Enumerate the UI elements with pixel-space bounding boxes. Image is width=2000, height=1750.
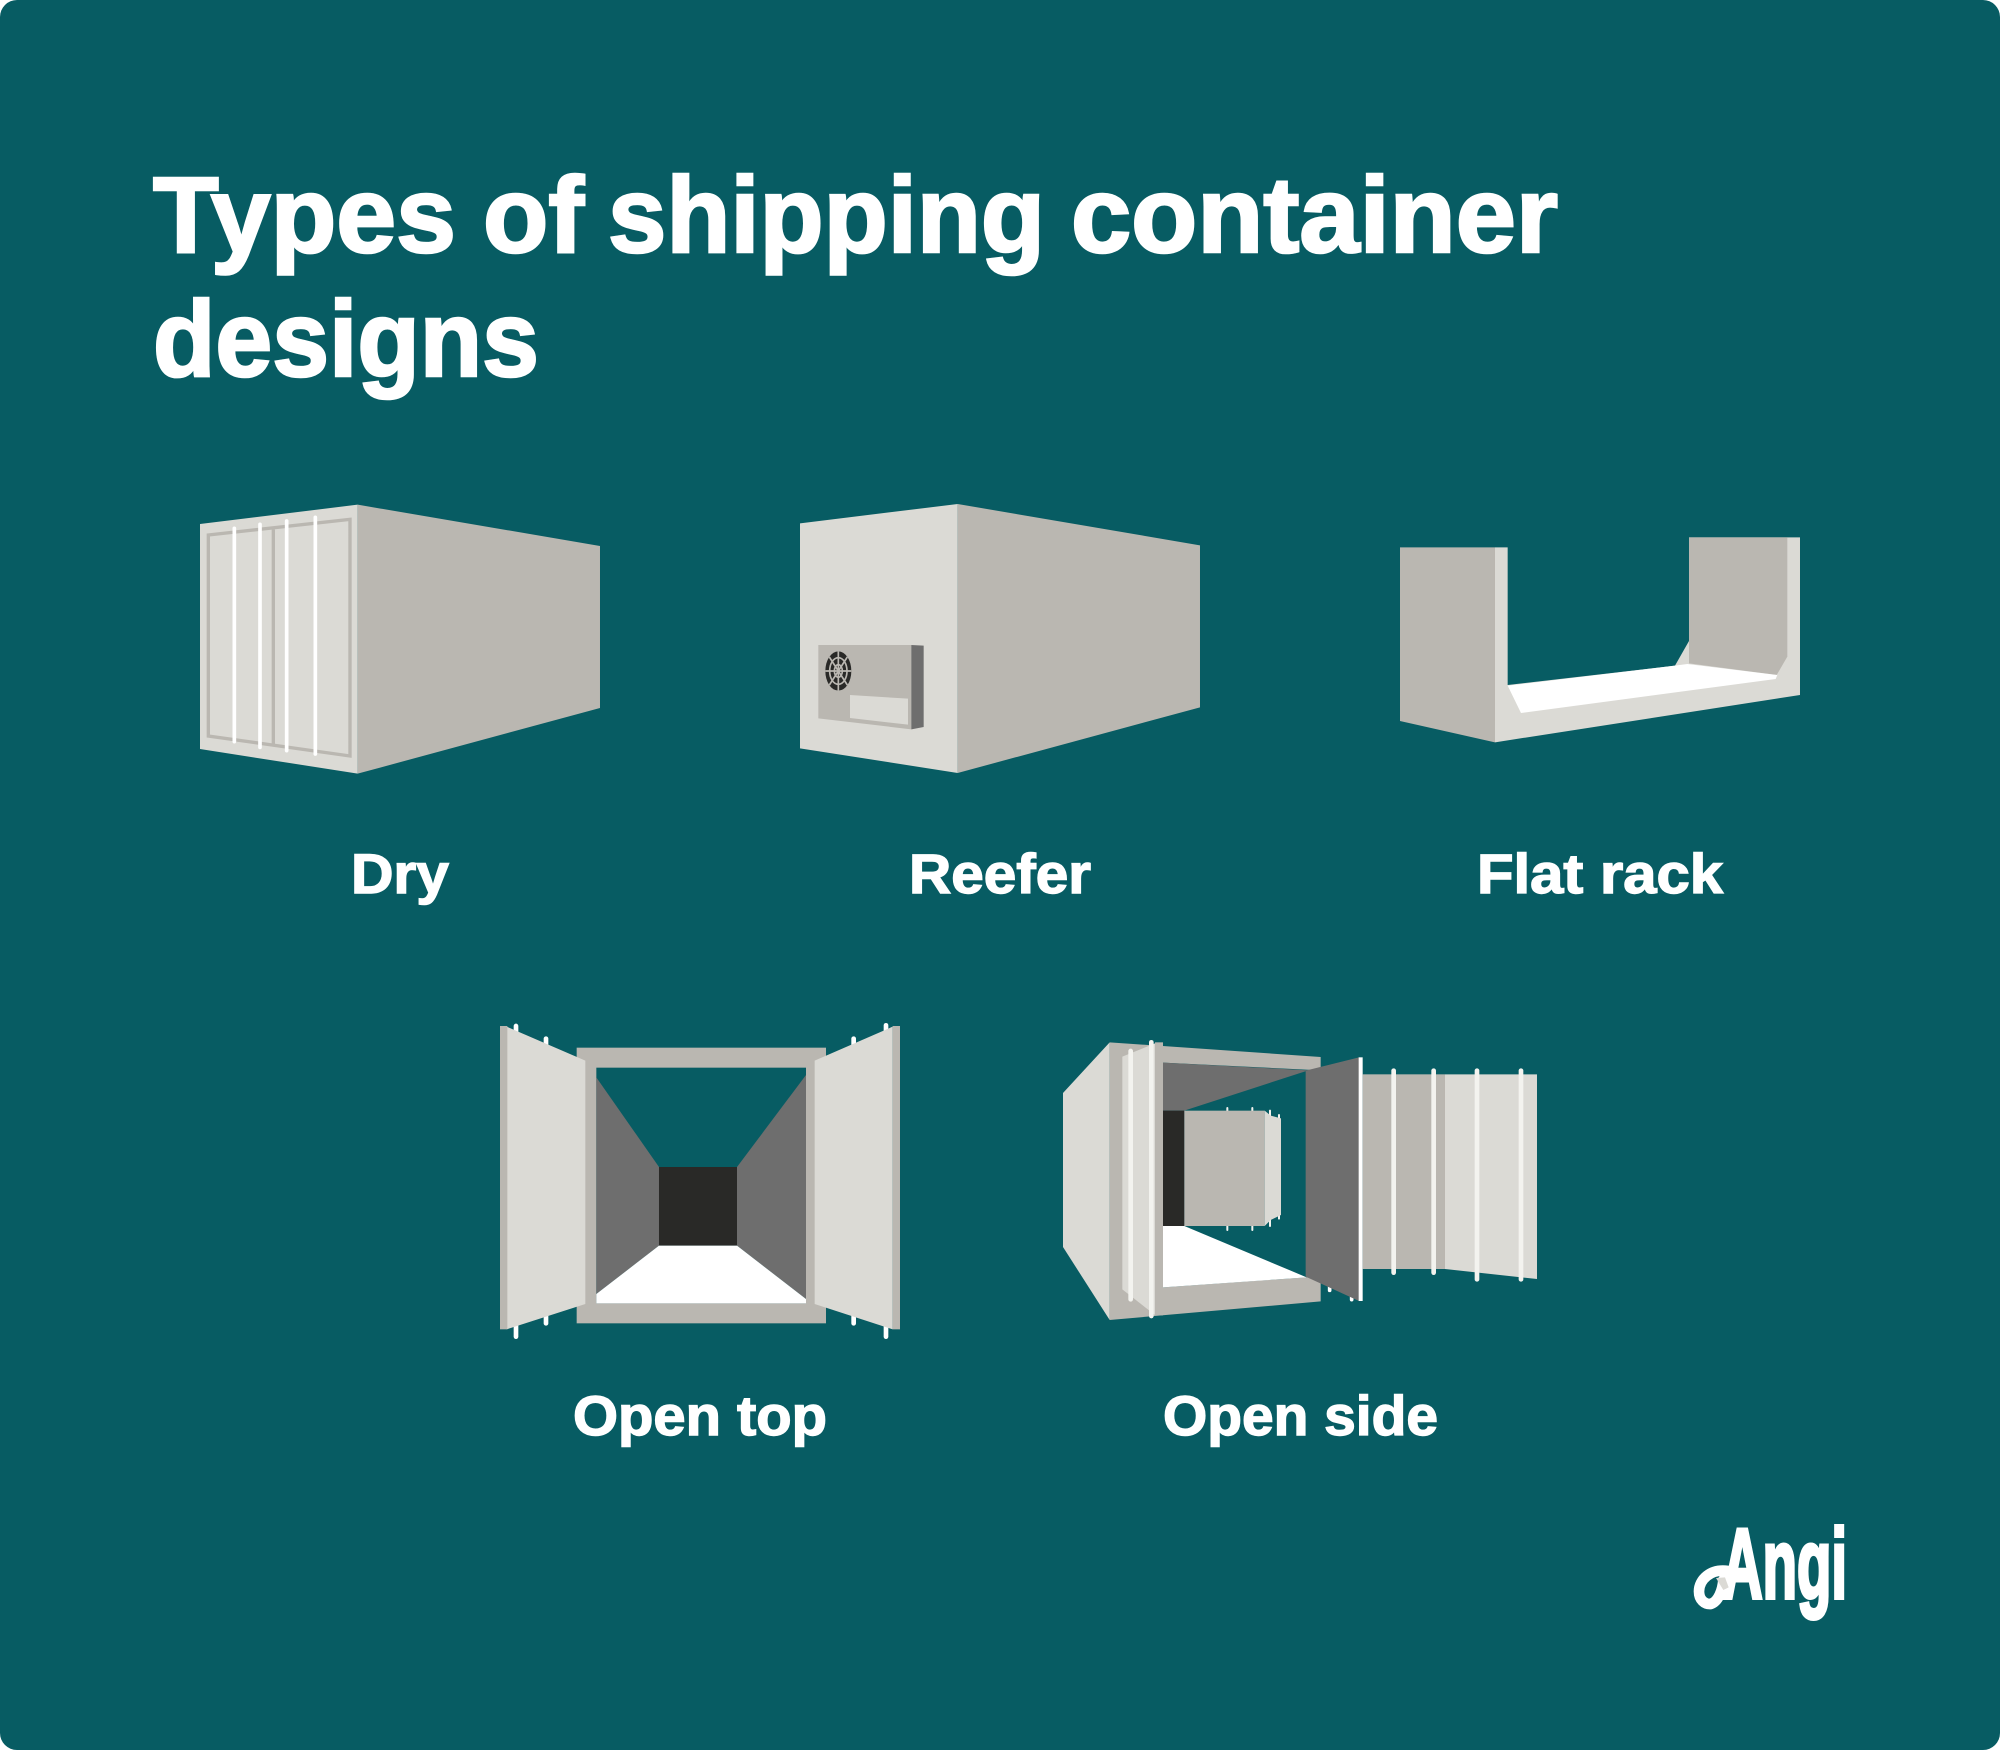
label: open top: Open top	[573, 1384, 827, 1447]
icon: open top container	[500, 1025, 900, 1337]
title: shipping	[608, 154, 1045, 275]
title	[153, 154, 1558, 399]
logo: Angi	[1699, 1508, 1847, 1619]
icon: flat rack container	[1400, 537, 1800, 742]
icon: reefer container	[800, 504, 1200, 773]
label: open side: Open side	[1163, 1384, 1438, 1447]
label: flat rack: Flat rack	[1477, 842, 1724, 905]
label: dry: Dry	[351, 842, 449, 905]
logo: Angi: Angi	[1722, 1508, 1847, 1619]
refrigeration unit	[818, 645, 924, 729]
icon: open side container	[1063, 1042, 1537, 1320]
icon: dry container	[200, 505, 600, 774]
title: designs	[153, 278, 539, 399]
label: reefer: Reefer	[909, 842, 1091, 905]
title: of	[483, 154, 585, 275]
title: container	[1071, 154, 1558, 275]
title: Types	[153, 154, 456, 275]
